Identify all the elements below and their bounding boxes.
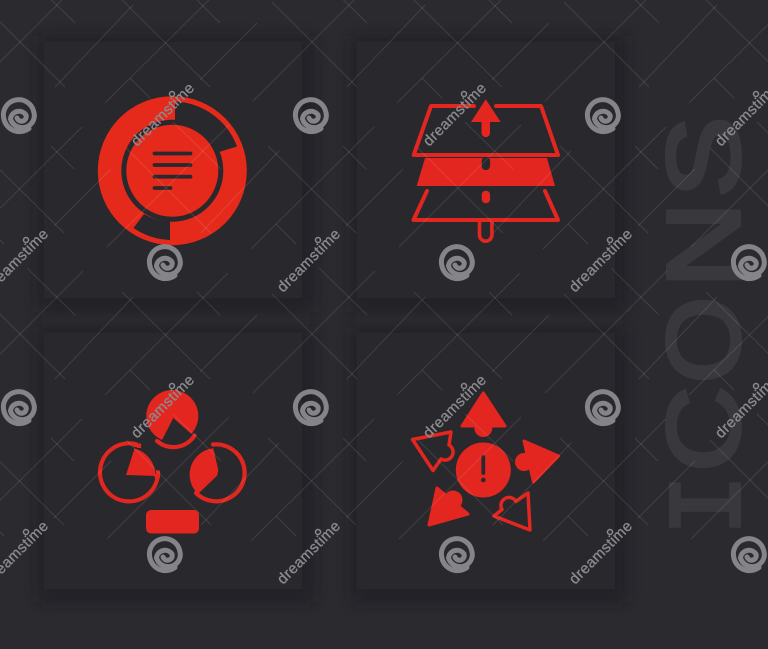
top right gap <box>175 102 237 152</box>
watermark text: dreamstime <box>128 372 198 442</box>
watermark text <box>0 80 768 588</box>
arrow: bottom left <box>429 488 468 525</box>
panel: top left <box>44 42 302 298</box>
panel: bottom left <box>44 333 302 589</box>
icon: three pie charts and a bar <box>100 390 245 534</box>
side title: ICONS: I <box>653 474 768 536</box>
watermark text: dreamstime <box>420 80 490 150</box>
icon: alert with five arrows <box>412 393 558 530</box>
watermark spirals <box>3 100 764 571</box>
right pie <box>190 444 245 501</box>
alert circle <box>456 442 511 498</box>
document lines <box>154 154 190 188</box>
panel: shadows <box>38 36 627 603</box>
icon: donut chart with document <box>98 96 247 245</box>
side title: ICONS: O <box>646 297 761 383</box>
watermark text: dreamstime <box>274 226 344 296</box>
side title: ICONS <box>646 116 768 536</box>
side title: ICONS: C <box>646 386 761 472</box>
panel: bottom right <box>357 333 615 589</box>
arrow: right <box>516 441 558 482</box>
icon: layers with up arrow <box>414 99 558 241</box>
arrow <box>471 99 501 137</box>
watermark text: dreamstime <box>274 518 344 588</box>
side title: ICONS: N <box>646 202 761 288</box>
arrow: top <box>462 393 505 436</box>
bar <box>146 510 199 534</box>
panel: top right <box>357 42 615 298</box>
left pie <box>100 443 158 501</box>
arrow: bottom right <box>494 493 530 530</box>
watermark text: dreamstime <box>420 372 490 442</box>
watermark text: dreamstime <box>566 518 636 588</box>
watermark copyright marks <box>24 92 758 534</box>
bottom gap <box>134 214 170 240</box>
arrow: top left <box>412 432 453 470</box>
watermark text: dreamstime <box>128 80 198 150</box>
watermark text: dreamstime <box>566 226 636 296</box>
top pie <box>146 390 198 447</box>
side title: ICONS: S <box>646 116 761 198</box>
